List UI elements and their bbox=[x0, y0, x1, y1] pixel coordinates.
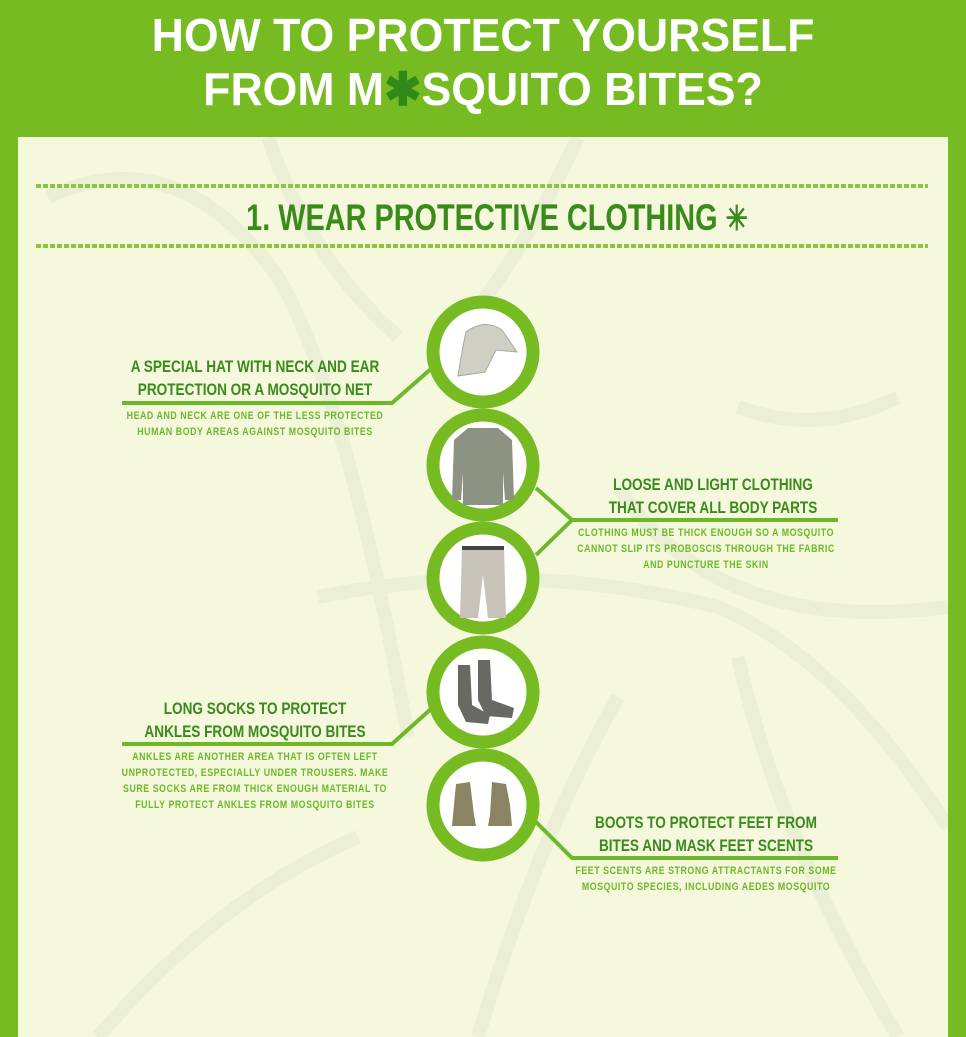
icon: hat bbox=[458, 324, 517, 376]
text: socks bbox=[122, 699, 388, 811]
title: FROM M✱SQUITO BITES? bbox=[203, 63, 763, 115]
text: BOOTS TO PROTECT FEET FROM bbox=[595, 813, 817, 832]
text: HUMAN BODY AREAS AGAINST MOSQUITO BITES bbox=[137, 426, 373, 438]
text: FEET SCENTS ARE STRONG ATTRACTANTS FOR SOME bbox=[575, 865, 837, 877]
icon: shirt bbox=[452, 428, 514, 505]
section heading: 1. WEAR PROTECTIVE CLOTHING ✳ bbox=[246, 197, 748, 238]
text: HEAD AND NECK ARE ONE OF THE LESS PROTECTED bbox=[127, 410, 383, 422]
text: THAT COVER ALL BODY PARTS bbox=[609, 498, 817, 517]
icon: socks bbox=[458, 660, 514, 724]
text: MOSQUITO SPECIES, INCLUDING AEDES MOSQUITO bbox=[582, 881, 830, 893]
icon: pants bbox=[460, 546, 506, 618]
text: SURE SOCKS ARE FROM THICK ENOUGH MATERIAL TO bbox=[123, 783, 387, 795]
text: boots bbox=[575, 813, 837, 893]
icon: boots bbox=[452, 782, 512, 826]
dashed dividers bbox=[36, 184, 928, 248]
text: BITES AND MASK FEET SCENTS bbox=[599, 836, 813, 855]
text: UNPROTECTED, ESPECIALLY UNDER TROUSERS. MAKE bbox=[122, 767, 388, 779]
text: LONG SOCKS TO PROTECT bbox=[164, 699, 346, 718]
text: LOOSE AND LIGHT CLOTHING bbox=[613, 475, 813, 494]
text: clothing bbox=[577, 475, 835, 571]
text: CANNOT SLIP ITS PROBOSCIS THROUGH THE FABRIC bbox=[577, 543, 835, 555]
text: PROTECTION OR A MOSQUITO NET bbox=[138, 380, 372, 399]
text: hat bbox=[127, 357, 383, 438]
text: AND PUNCTURE THE SKIN bbox=[643, 559, 769, 571]
text: CLOTHING MUST BE THICK ENOUGH SO A MOSQUITO bbox=[578, 527, 834, 539]
text: FULLY PROTECT ANKLES FROM MOSQUITO BITES bbox=[135, 799, 375, 811]
title: HOW TO PROTECT YOURSELF bbox=[152, 9, 814, 61]
text: ANKLES ARE ANOTHER AREA THAT IS OFTEN LEFT bbox=[132, 751, 378, 763]
title bbox=[152, 9, 814, 115]
text: ANKLES FROM MOSQUITO BITES bbox=[144, 722, 366, 741]
text: A SPECIAL HAT WITH NECK AND EAR bbox=[131, 357, 379, 376]
